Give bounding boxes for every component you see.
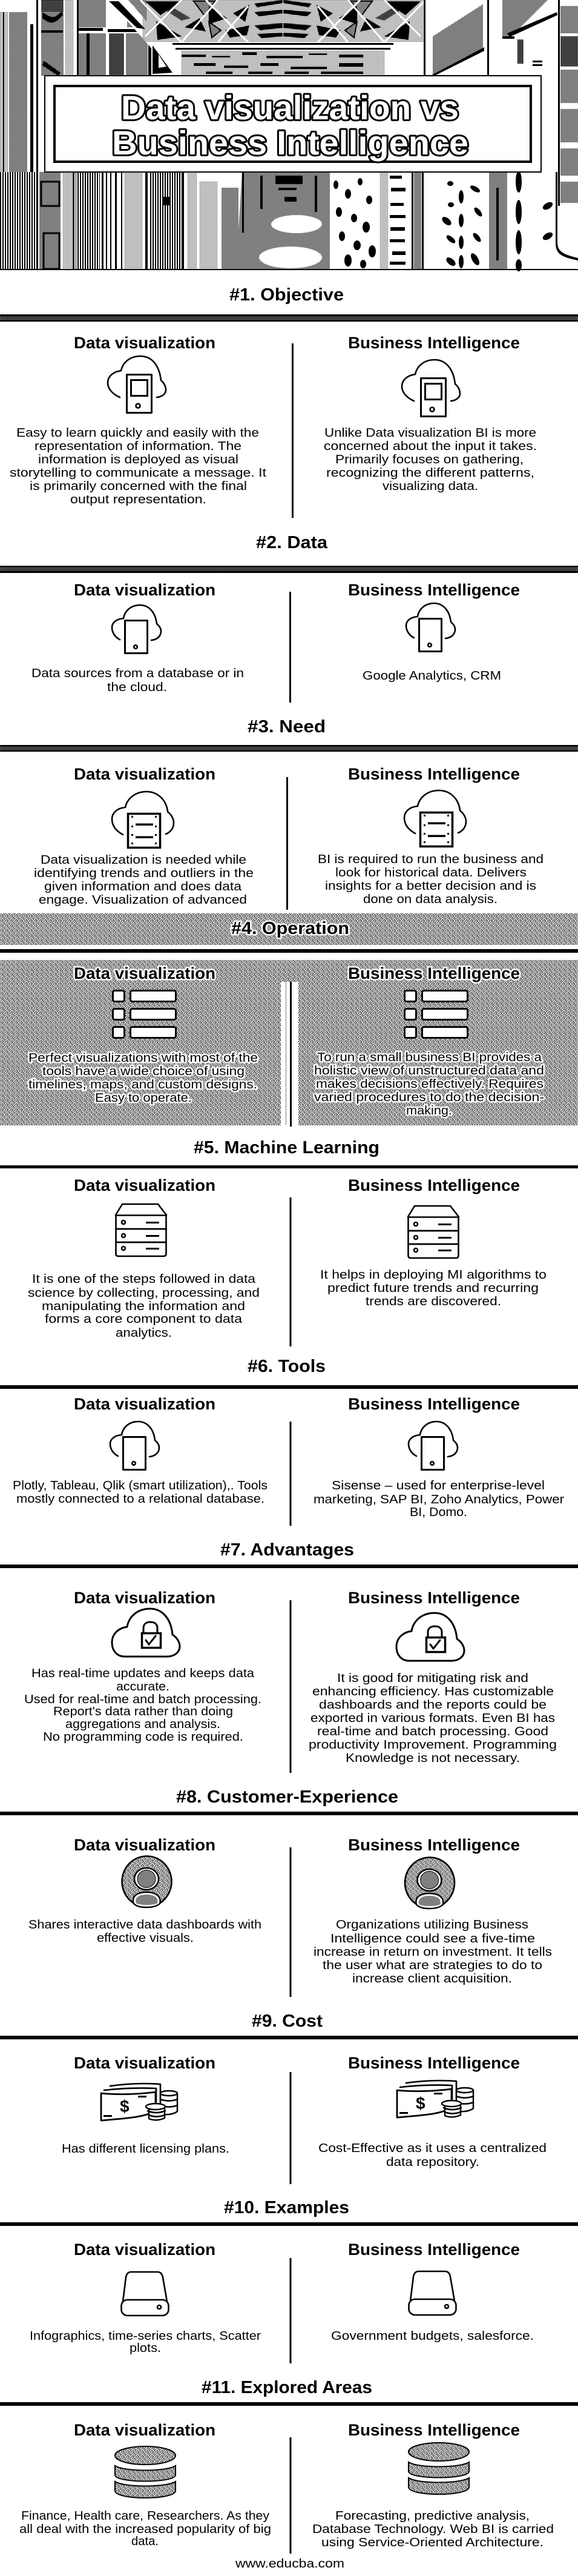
column heading: Data visualization — [74, 1589, 215, 1607]
text block: It is good for mitigating risk and — [337, 1672, 528, 1685]
text block: enhancing efficiency. Has customizable — [312, 1685, 554, 1698]
section heading: #5. Machine Learning — [194, 1138, 379, 1157]
icon: cloud lock — [396, 1613, 464, 1661]
text block — [324, 426, 537, 493]
icon: database — [409, 2443, 469, 2494]
text block: Easy to learn quickly and easily with the — [16, 426, 259, 440]
icon: cloud phone — [409, 1422, 458, 1469]
panel: #4 Operation — [0, 910, 578, 1127]
text block: increase in return on investment. It tells — [314, 1945, 552, 1959]
column heading: Business Intelligence — [348, 964, 520, 982]
text block: Primarily focuses on gathering, — [335, 453, 524, 466]
text block: making. — [406, 1104, 452, 1117]
text block: holistic view of unstructured data and — [314, 1064, 544, 1078]
icon: customer avatar — [405, 1857, 455, 1909]
icon: money and coins — [101, 2084, 177, 2121]
icon: customer avatar — [122, 1856, 172, 1907]
section heading: #2. Data — [256, 533, 328, 552]
icon: cloud phone — [112, 605, 161, 653]
text block: forms a core component to data — [45, 1313, 243, 1326]
column heading: Business Intelligence — [348, 1589, 520, 1607]
text block — [31, 667, 244, 694]
text block: timelines, maps, and custom designs. — [28, 1078, 257, 1091]
text block — [28, 1051, 258, 1105]
text block: done on data analysis. — [363, 893, 498, 906]
text block: Data visualization is needed while — [41, 853, 246, 867]
section heading: #8. Customer-Experience — [176, 1787, 398, 1807]
text block: To run a small business BI provides a — [317, 1051, 542, 1064]
text block: Has real-time updates and keeps data — [31, 1667, 255, 1680]
text block: aggregations and analysis. — [65, 1718, 220, 1731]
column heading: Data visualization — [74, 2054, 215, 2072]
text block: Knowledge is not necessary. — [346, 1752, 520, 1765]
section heading: #11. Explored Areas — [202, 2378, 372, 2397]
text block: trends are discovered. — [366, 1295, 501, 1308]
text block: is primarily concerned with the final — [30, 480, 247, 493]
text block: given information and does data — [44, 880, 242, 893]
section heading: #4. Operation — [231, 919, 349, 938]
header bar — [0, 314, 578, 322]
text block: marketing, SAP BI, Zoho Analytics, Power — [314, 1493, 564, 1506]
panel: #10 Examples — [0, 2198, 578, 2363]
footer: website: www.educba.com — [235, 2557, 344, 2571]
text block: visualizing data. — [383, 480, 478, 493]
column heading: Business Intelligence — [348, 334, 520, 352]
text block: Organizations utilizing Business — [336, 1918, 528, 1932]
text block: storytelling to communicate a message. It — [10, 466, 266, 480]
column heading: Data visualization — [74, 334, 215, 352]
column heading: Business Intelligence — [348, 1395, 520, 1413]
section heading: #3. Need — [248, 717, 326, 737]
text block: It helps in deploying MI algorithms to — [320, 1268, 547, 1282]
text block: Intelligence could see a five-time — [330, 1932, 535, 1945]
text block: insights for a better decision and is — [325, 879, 536, 893]
text block: BI is required to run the business and — [318, 853, 544, 866]
column heading: Business Intelligence — [348, 2240, 520, 2259]
text block: tools have a wide choice of using — [42, 1065, 245, 1078]
text block — [34, 853, 254, 907]
text block: Data sources from a database or in — [31, 667, 244, 680]
icon: server stack — [408, 1206, 459, 1258]
text block: identifying trends and outliers in the — [34, 867, 254, 880]
icon: list rows — [404, 991, 467, 1038]
panel: #1 Objective — [0, 285, 578, 518]
text block — [314, 1479, 564, 1519]
text block: real-time and batch processing. Good — [317, 1725, 548, 1738]
text block: predict future trends and recurring — [327, 1282, 539, 1295]
icon: cloud phone — [406, 603, 455, 652]
text block — [13, 1479, 268, 1506]
text block: all deal with the increased popularity of big — [19, 2523, 271, 2536]
section heading: #1. Objective — [229, 285, 344, 305]
text block: the user what are strategies to do to — [323, 1959, 542, 1972]
header bar — [0, 1812, 578, 1815]
panel: #3 Need — [0, 717, 578, 910]
column heading: Business Intelligence — [348, 581, 520, 599]
header bar — [0, 949, 578, 953]
panel: #7 Advantages — [0, 1540, 578, 1773]
text block: productivity Improvement. Programming — [309, 1738, 557, 1752]
text block: analytics. — [116, 1326, 172, 1340]
icon: cloud phone — [110, 1422, 159, 1469]
hero: data centre corridor photo — [0, 0, 578, 271]
text block: look for historical data. Delivers — [335, 866, 527, 879]
icon: cloud server — [404, 790, 466, 847]
text block: Infographics, time-series charts, Scatter — [30, 2329, 261, 2343]
text block — [24, 1667, 261, 1744]
text block: data repository. — [386, 2156, 479, 2169]
text block: data. — [131, 2535, 159, 2548]
panel: #9 Cost — [0, 2011, 578, 2184]
text block: Finance, Health care, Researchers. As they — [21, 2509, 269, 2523]
text block: manipulating the information and — [42, 1300, 245, 1313]
icon: database — [115, 2446, 176, 2498]
column heading: Data visualization — [74, 581, 215, 599]
column heading: Data visualization — [74, 2421, 215, 2439]
text block: science by collecting, processing, and — [28, 1286, 260, 1300]
section heading: #6. Tools — [248, 1357, 326, 1376]
text block: Has different licensing plans. — [62, 2142, 229, 2156]
text block: BI, Domo. — [410, 1506, 467, 1519]
text block: Government budgets, salesforce. — [331, 2329, 534, 2343]
column heading: Business Intelligence — [348, 1176, 520, 1194]
text block: recognizing the different patterns, — [326, 466, 534, 480]
header bar — [0, 566, 578, 573]
column heading: Business Intelligence — [348, 1836, 520, 1854]
icon: money and coins — [397, 2081, 473, 2117]
text block — [19, 2509, 271, 2548]
text block: Google Analytics, CRM — [363, 669, 501, 683]
panel: #2 Data — [0, 533, 578, 703]
title box — [45, 76, 541, 172]
column heading: Business Intelligence — [348, 2054, 520, 2072]
section heading: #9. Cost — [252, 2011, 323, 2031]
panel: #8 Customer-Experience — [0, 1787, 578, 1997]
text block: mostly connected to a relational database. — [16, 1492, 264, 1506]
text block — [10, 426, 266, 506]
text block: makes decisions effectively. Requires — [316, 1078, 544, 1091]
column heading: Business Intelligence — [348, 2421, 520, 2439]
icon: server stack — [116, 1204, 166, 1256]
column heading: Data visualization — [74, 1836, 215, 1854]
text block: dashboards and the reports could be — [319, 1698, 547, 1712]
text block — [318, 2142, 547, 2169]
icon: cloud phone — [402, 360, 460, 417]
text block: Database Technology. Web BI is carried — [312, 2523, 554, 2536]
title: Data visualization vs — [121, 88, 459, 127]
text block: varied procedures to do the decision- — [314, 1091, 544, 1104]
header bar — [0, 2036, 578, 2039]
text block: output representation. — [70, 493, 206, 506]
text block — [30, 2329, 261, 2355]
text block: Easy to operate. — [95, 1091, 192, 1105]
text block: Sisense – used for enterprise-level — [332, 1479, 545, 1492]
text block: Forecasting, predictive analysis, — [335, 2509, 530, 2523]
text block: exported in various formats. Even BI has — [310, 1712, 555, 1725]
column heading: Data visualization — [74, 2240, 215, 2259]
text block: No programming code is required. — [43, 1730, 243, 1744]
text block: information is deployed as visual — [38, 453, 238, 466]
panel: #5 Machine Learning — [0, 1138, 578, 1346]
text block: Used for real-time and batch processing. — [24, 1693, 261, 1706]
text block: Shares interactive data dashboards with — [28, 1918, 261, 1932]
header bar — [0, 2402, 578, 2406]
text block — [309, 1672, 557, 1765]
text block: Plotly, Tableau, Qlik (smart utilization),. Tools — [13, 1479, 268, 1492]
text block: It is one of the steps followed in data — [32, 1273, 256, 1286]
panel: #11 Explored Areas — [0, 2378, 578, 2554]
text block — [312, 2509, 554, 2549]
column heading: Business Intelligence — [348, 765, 520, 783]
header bar — [0, 1385, 578, 1389]
header bar — [0, 2222, 578, 2226]
text block: Report's data rather than doing — [53, 1705, 233, 1718]
title — [112, 88, 468, 162]
text block: using Service-Oriented Architecture. — [321, 2536, 544, 2549]
text block — [28, 1918, 261, 1945]
column heading: Data visualization — [74, 765, 215, 783]
text block: Perfect visualizations with most of the — [28, 1051, 258, 1065]
column heading: Data visualization — [74, 1176, 215, 1194]
section heading: #7. Advantages — [220, 1540, 354, 1560]
text block — [314, 1051, 544, 1117]
text block — [314, 1918, 552, 1985]
icon: cloud server — [112, 792, 174, 848]
panel: #6 Tools — [0, 1357, 578, 1526]
icon: list rows — [113, 991, 176, 1038]
text block: concerned about the input it takes. — [324, 440, 537, 453]
text block: Unlike Data visualization BI is more — [324, 426, 536, 440]
text block — [28, 1273, 260, 1340]
icon: storage drive — [121, 2272, 168, 2316]
text block: engage. Visualization of advanced — [39, 893, 247, 907]
icon: cloud lock — [112, 1609, 180, 1657]
column heading: Data visualization — [74, 964, 215, 982]
header bar — [0, 1564, 578, 1568]
text block — [318, 853, 544, 906]
text block: Cost-Effective as it uses a centralized — [318, 2142, 547, 2155]
icon: storage drive — [409, 2271, 456, 2315]
text block: effective visuals. — [97, 1932, 194, 1945]
header bar — [0, 745, 578, 752]
icon: cloud phone — [108, 356, 166, 413]
section heading: #10. Examples — [224, 2198, 349, 2217]
header bar — [0, 1165, 578, 1168]
column heading: Data visualization — [74, 1395, 215, 1413]
text block: plots. — [130, 2342, 161, 2355]
title: Business Intelligence — [112, 124, 468, 162]
text block — [320, 1268, 547, 1308]
text block: accurate. — [116, 1680, 169, 1694]
text block: increase client acquisition. — [352, 1972, 512, 1985]
text block: the cloud. — [107, 681, 167, 694]
text block: representation of information. The — [34, 440, 241, 453]
